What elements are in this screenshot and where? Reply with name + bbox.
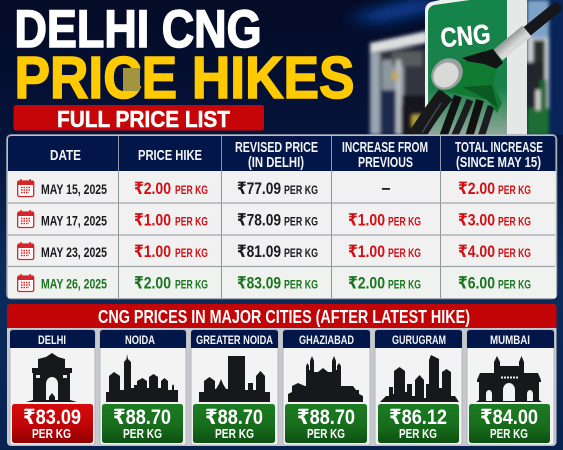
- price table: [7, 135, 556, 298]
- icon: Noida skyline: [106, 354, 178, 402]
- CNG label: CNG: [439, 19, 492, 53]
- row May 15: PER KG: [175, 183, 208, 197]
- row May 17: PER KG: [388, 214, 421, 228]
- card: Mumbai: PER KG: [490, 427, 528, 441]
- last row tint: [8, 267, 556, 298]
- card: Noida: [100, 330, 186, 445]
- card: Gurugram: ₹86.12: [389, 406, 447, 429]
- row May 23: ₹81.09: [237, 242, 281, 261]
- card: Gurugram: [375, 330, 462, 445]
- card: Mumbai: [467, 330, 554, 445]
- card: Greater Noida: ₹88.70: [205, 406, 263, 429]
- nozzle hose and chrome collar: [525, 8, 556, 33]
- card: Noida: NOIDA: [125, 335, 155, 347]
- calendar icon: [18, 210, 34, 228]
- table header: PREVIOUS: [358, 154, 413, 171]
- table header: PRICE HIKE: [138, 147, 202, 164]
- CNG green panel: [425, 0, 508, 135]
- row May 17: PER KG: [175, 214, 208, 228]
- card: Ghaziabad: PER KG: [307, 427, 345, 441]
- row May 26: [18, 274, 531, 292]
- card: Greater Noida: [191, 330, 278, 445]
- card: Ghaziabad: GHAZIABAD: [299, 335, 354, 347]
- full price list banner: FULL PRICE LIST: [57, 106, 230, 132]
- card: Gurugram: PER KG: [399, 427, 437, 441]
- card: Delhi: ₹83.09: [23, 406, 81, 429]
- icon: Gateway of India: [476, 356, 542, 402]
- row May 15: MAY 15, 2025: [41, 181, 107, 197]
- card: Mumbai: MUMBAI: [490, 335, 530, 347]
- title line 2: PRICE HIKES: [14, 45, 354, 111]
- table header: REVISED PRICE: [235, 139, 318, 156]
- row May 26: ₹6.00: [458, 274, 495, 292]
- row May 23: MAY 23, 2025: [41, 244, 107, 260]
- row May 26: PER KG: [175, 278, 208, 292]
- calendar icon: [18, 274, 34, 292]
- table header: (IN DELHI): [248, 154, 304, 171]
- blurred station canopy: [370, 0, 549, 135]
- row May 17: MAY 17, 2025: [41, 212, 107, 228]
- card: Ghaziabad: ₹88.70: [297, 406, 355, 429]
- card: Delhi: DELHI: [38, 335, 66, 347]
- chrome disc: [425, 52, 469, 96]
- card: Greater Noida: GREATER NOIDA: [196, 335, 273, 347]
- row May 23: PER KG: [284, 246, 318, 260]
- row May 17: ₹3.00: [458, 210, 495, 230]
- hoses: [416, 94, 491, 137]
- row May 26: PER KG: [498, 278, 531, 292]
- table header: INCREASE FROM: [342, 139, 428, 156]
- row May 17: PER KG: [284, 214, 318, 228]
- table header: DATE: [50, 147, 81, 164]
- row May 23: ₹1.00: [134, 242, 171, 261]
- row May 15: ₹2.00: [134, 179, 171, 198]
- row May 23: PER KG: [175, 246, 208, 260]
- row May 23: ₹1.00: [348, 242, 385, 261]
- row May 23: PER KG: [498, 246, 531, 260]
- card: Gurugram: GURUGRAM: [392, 335, 446, 347]
- row May 17: ₹1.00: [348, 210, 385, 230]
- panel: city prices: [7, 304, 556, 446]
- card: Delhi: PER KG: [32, 427, 71, 441]
- row May 15: PER KG: [284, 183, 318, 197]
- icon: India Gate: [26, 353, 77, 402]
- row May 26: ₹83.09: [237, 274, 281, 292]
- card: Noida: PER KG: [123, 427, 162, 441]
- card: Ghaziabad: [283, 330, 370, 445]
- card: Greater Noida: PER KG: [215, 427, 254, 441]
- card: Noida: ₹88.70: [113, 406, 171, 429]
- card: Delhi: [10, 330, 95, 445]
- row May 17: ₹78.09: [237, 210, 281, 230]
- card: Mumbai: ₹84.00: [480, 406, 538, 429]
- title line 1: DELHI CNG: [14, 0, 262, 59]
- calendar icon: [18, 242, 34, 260]
- calendar icon: [18, 179, 34, 196]
- title: [14, 0, 354, 111]
- icon: Ghaziabad monument: [288, 356, 363, 402]
- row May 26: ₹2.00: [348, 274, 385, 292]
- row May 15: ₹77.09: [237, 179, 281, 198]
- row May 23: ₹4.00: [458, 242, 495, 261]
- row May 26: MAY 26, 2025: [41, 276, 107, 292]
- table header: [8, 136, 556, 171]
- row May 23: PER KG: [388, 246, 421, 260]
- row May 26: ₹2.00: [134, 274, 171, 292]
- row May 26: PER KG: [388, 278, 421, 292]
- row May 15: [18, 179, 531, 198]
- icon: Greater Noida skyline: [199, 356, 270, 402]
- row May 17: [18, 210, 531, 230]
- fuel pump photo with CNG nozzle: [370, 0, 556, 137]
- white column: [507, 0, 527, 135]
- green nozzle body: [437, 60, 502, 113]
- row May 26: PER KG: [284, 278, 318, 292]
- icon: Gurugram skyline: [380, 355, 459, 402]
- row May 15: ₹2.00: [458, 179, 495, 198]
- row May 23: [18, 242, 531, 261]
- row May 15: PER KG: [498, 183, 531, 197]
- row May 17: PER KG: [498, 214, 531, 228]
- row May 17: ₹1.00: [134, 210, 171, 230]
